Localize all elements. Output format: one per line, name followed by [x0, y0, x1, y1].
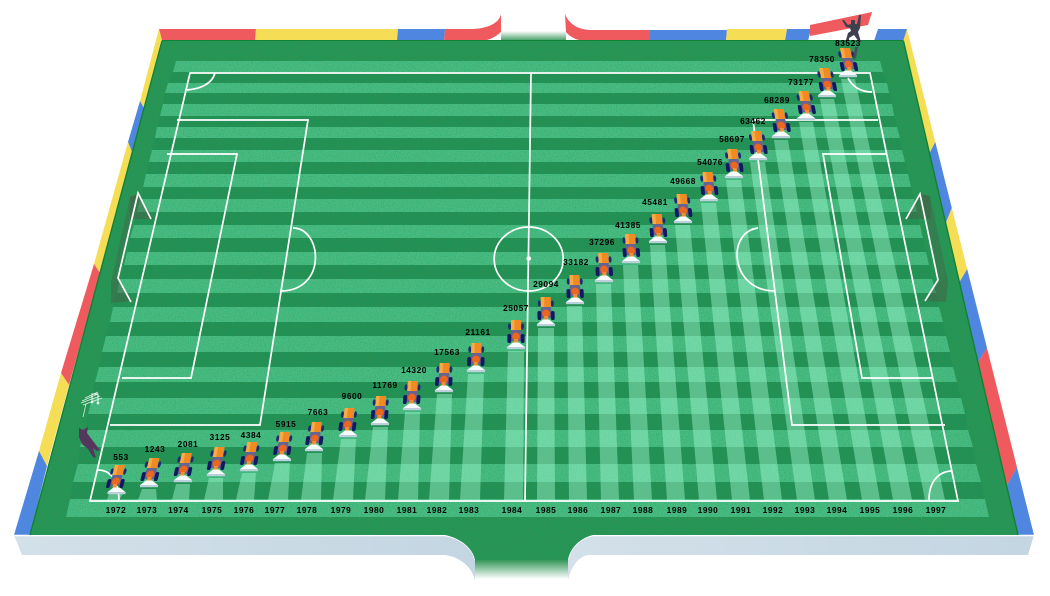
year labels: 1993: [795, 505, 815, 515]
value labels: 3125: [210, 432, 230, 442]
tractor 1992: [724, 149, 744, 178]
mown horizontal stripes: [66, 61, 989, 517]
year labels: 1976: [234, 505, 254, 515]
value labels: 41385: [615, 220, 641, 230]
musician figure with music notes: [79, 392, 102, 458]
year labels: [106, 505, 946, 515]
red banner carried off the wall: [810, 12, 872, 36]
tractor 1977: [272, 432, 294, 461]
year labels: 1996: [893, 505, 913, 515]
value labels: 11769: [372, 380, 398, 390]
tractor 1989: [648, 214, 668, 243]
tractor 1995: [795, 91, 816, 120]
tractor 1973: [140, 458, 163, 487]
year labels: 1975: [202, 505, 222, 515]
left goal: [111, 193, 154, 303]
back wall: top left: [159, 14, 501, 41]
left wall coloured bands: [14, 29, 162, 535]
tractor 1983: [466, 343, 486, 372]
tractor 1981: [402, 381, 422, 410]
centre spot: [526, 256, 531, 261]
year labels: 1974: [168, 505, 189, 515]
tractor 1996: [816, 68, 837, 97]
tractor 1988: [621, 234, 640, 263]
value labels: 25057: [503, 303, 529, 313]
bar chart: mown vertical strips, one per year: [107, 79, 945, 500]
right goal: [906, 194, 948, 302]
value labels: 37296: [589, 237, 615, 247]
value labels: 54076: [697, 157, 723, 167]
year labels: 1991: [731, 505, 751, 515]
year labels: 1992: [763, 505, 783, 515]
year labels: 1977: [265, 505, 285, 515]
year labels: 1978: [297, 505, 317, 515]
value labels: 14320: [401, 365, 427, 375]
year labels: 1982: [427, 505, 447, 515]
tractor 1975: [206, 447, 228, 476]
year labels: 1990: [698, 505, 718, 515]
tractor 1990: [673, 194, 693, 223]
front wall: [14, 535, 1034, 580]
tractor 1982: [434, 363, 454, 392]
tractor 1976: [240, 442, 261, 471]
value labels: 5915: [276, 419, 296, 429]
value labels: 58697: [719, 134, 745, 144]
year labels: 1979: [331, 505, 351, 515]
tractor 1978: [304, 422, 326, 451]
year labels: 1973: [137, 505, 157, 515]
value labels: 33182: [563, 257, 589, 267]
pitch markings: [90, 73, 958, 501]
value labels: 78350: [809, 54, 835, 64]
value labels: 553: [113, 452, 129, 462]
value labels: 17563: [434, 347, 460, 357]
year labels: 1985: [536, 505, 556, 515]
tractor 1984: [506, 320, 526, 349]
year labels: 1984: [502, 505, 522, 515]
value labels: 29094: [533, 279, 559, 289]
year labels: 1983: [459, 505, 479, 515]
tractor 1985: [536, 297, 556, 326]
tractor 1987: [594, 253, 614, 282]
year labels: 1980: [364, 505, 384, 515]
tractor 1991: [699, 172, 719, 201]
back wall: top right: [565, 14, 907, 41]
year labels: 1987: [601, 505, 621, 515]
year labels: 1981: [397, 505, 417, 515]
tractors: [106, 48, 859, 494]
right wall coloured bands: [904, 29, 1034, 535]
value labels: 68289: [764, 95, 790, 105]
tractor 1997: [836, 48, 859, 77]
tractor 1980: [370, 396, 390, 425]
tractor 1986: [566, 275, 584, 304]
tractor 1972: [106, 465, 129, 494]
value labels: 21161: [465, 327, 491, 337]
value labels: 4384: [241, 430, 261, 440]
value labels: 2081: [178, 439, 198, 449]
year labels: 1989: [667, 505, 687, 515]
tractor 1974: [173, 453, 196, 482]
value labels: 49668: [670, 176, 696, 186]
value labels: [113, 38, 861, 462]
value labels: 45481: [642, 197, 668, 207]
year labels: 1995: [860, 505, 880, 515]
man lifting the banner: [842, 15, 861, 60]
value labels: 9600: [342, 391, 362, 401]
year labels: 1997: [926, 505, 946, 515]
value labels: 73177: [788, 77, 814, 87]
grass: goal gaps fading out: [475, 31, 568, 579]
value labels: 83523: [835, 38, 861, 48]
year labels: 1972: [106, 505, 126, 515]
year labels: 1988: [633, 505, 653, 515]
tractor 1979: [338, 408, 358, 437]
value labels: 1243: [145, 444, 165, 454]
tractor 1994: [770, 109, 791, 138]
dark stripes between the mown bands: [70, 72, 985, 499]
year labels: 1994: [827, 505, 847, 515]
year labels: 1986: [568, 505, 588, 515]
value labels: 7663: [308, 407, 328, 417]
tractor 1993: [747, 131, 768, 160]
value labels: 63462: [740, 116, 766, 126]
